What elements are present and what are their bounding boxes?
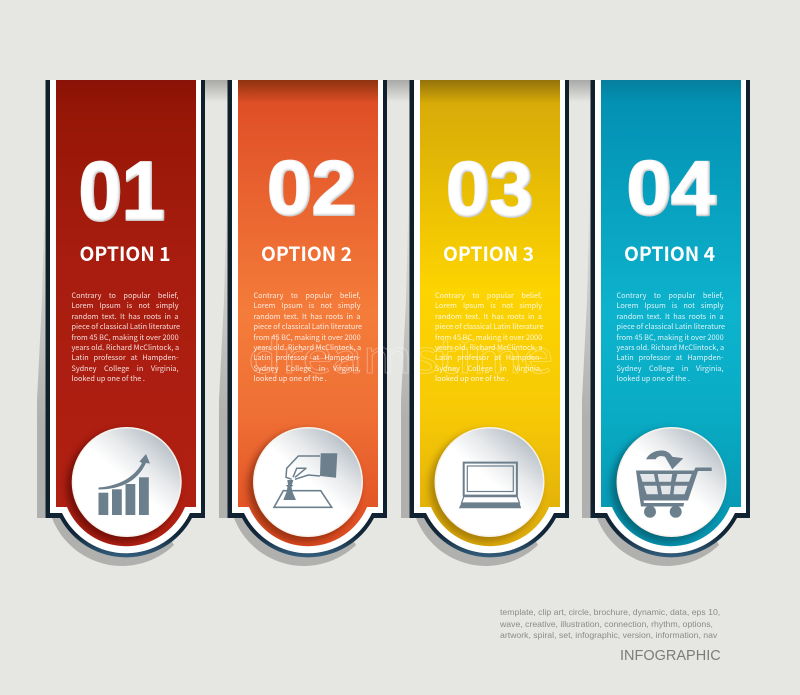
text block: years old. Richard McClintock, a <box>616 343 724 353</box>
icon disc with bar chart <box>66 427 182 542</box>
text block <box>72 291 180 384</box>
text block: Contrary to popular belief, <box>72 291 178 301</box>
text block: from 45 BC, making it over 2000 <box>254 333 361 343</box>
heading: option 2: OPTION 2 <box>261 238 352 267</box>
text block: Latin professor at Hampden- <box>72 353 178 363</box>
text block: Sydney College in Virginia, <box>254 364 360 374</box>
heading: option 1: OPTION 1 <box>80 238 170 267</box>
text block: random text. It has roots in a <box>435 312 542 322</box>
icon disc with shopping cart <box>611 427 726 542</box>
panel: option 4 <box>582 80 750 566</box>
heading: option 3: OPTION 3 <box>442 238 534 267</box>
text block: piece of classical Latin literature <box>616 322 725 332</box>
banner shape <box>219 80 387 566</box>
banner shape <box>37 80 205 566</box>
infographic label: INFOGRAPHIC <box>620 648 721 664</box>
text block <box>616 291 725 384</box>
keywords text: wave, creative, illustration, connection, rhythm, options, <box>500 618 713 628</box>
text block: random text. It has roots in a <box>616 312 724 322</box>
text block <box>435 291 544 384</box>
text block: random text. It has roots in a <box>254 312 360 322</box>
text block <box>254 291 362 384</box>
text block: from 45 BC, making it over 2000 <box>616 333 724 343</box>
text block: Lorem Ipsum is not simply <box>616 301 724 311</box>
text block: Sydney College in Virginia, <box>435 364 542 374</box>
text block: Sydney College in Virginia, <box>72 364 178 374</box>
text block: from 45 BC, making it over 2000 <box>435 333 542 343</box>
keywords text <box>500 607 720 640</box>
heading: option 4: OPTION 4 <box>624 238 715 267</box>
number 02: 02 <box>268 146 356 232</box>
text block: random text. It has roots in a <box>72 312 178 322</box>
text block: piece of classical Latin literature <box>435 322 544 332</box>
number 01: 01 <box>79 144 165 238</box>
banner shape <box>400 80 568 566</box>
text block: Lorem Ipsum is not simply <box>72 301 178 311</box>
text block: Contrary to popular belief, <box>254 291 360 301</box>
text block: Contrary to popular belief, <box>616 291 724 301</box>
text block: years old. Richard McClintock, a <box>435 343 543 353</box>
text block: looked up one of the . <box>435 374 508 384</box>
text block: Lorem Ipsum is not simply <box>435 301 542 311</box>
text block: looked up one of the . <box>616 374 690 384</box>
text block: piece of classical Latin literature <box>72 322 180 332</box>
number 03: 03 <box>446 148 533 232</box>
panel: option 2 <box>219 80 387 566</box>
text block: looked up one of the . <box>72 374 145 384</box>
icon disc with hand moving chess piece <box>248 427 363 542</box>
text block: looked up one of the . <box>254 374 327 384</box>
text block: Contrary to popular belief, <box>435 291 542 301</box>
text block: Latin professor at Hampden- <box>435 353 542 363</box>
text block: Sydney College in Virginia, <box>616 364 724 374</box>
keywords text: template, clip art, circle, brochure, dynamic, data, eps 10, <box>500 607 720 617</box>
panel: option 3 <box>401 80 569 566</box>
text block: Latin professor at Hampden- <box>616 353 724 363</box>
icon disc with laptop <box>429 427 544 542</box>
text block: years old. Richard McClintock, a <box>72 343 179 353</box>
panel: option 1 <box>37 80 205 566</box>
text block: piece of classical Latin literature <box>254 322 362 332</box>
banner shape <box>582 80 750 566</box>
number 04: 04 <box>627 146 716 232</box>
text block: from 45 BC, making it over 2000 <box>72 333 179 343</box>
keywords text: artwork, spiral, set, infographic, version, information, nav <box>500 630 717 640</box>
text block: Lorem Ipsum is not simply <box>254 301 360 311</box>
text block: Latin professor at Hampden- <box>254 353 360 363</box>
text block: years old. Richard McClintock, a <box>254 343 361 353</box>
